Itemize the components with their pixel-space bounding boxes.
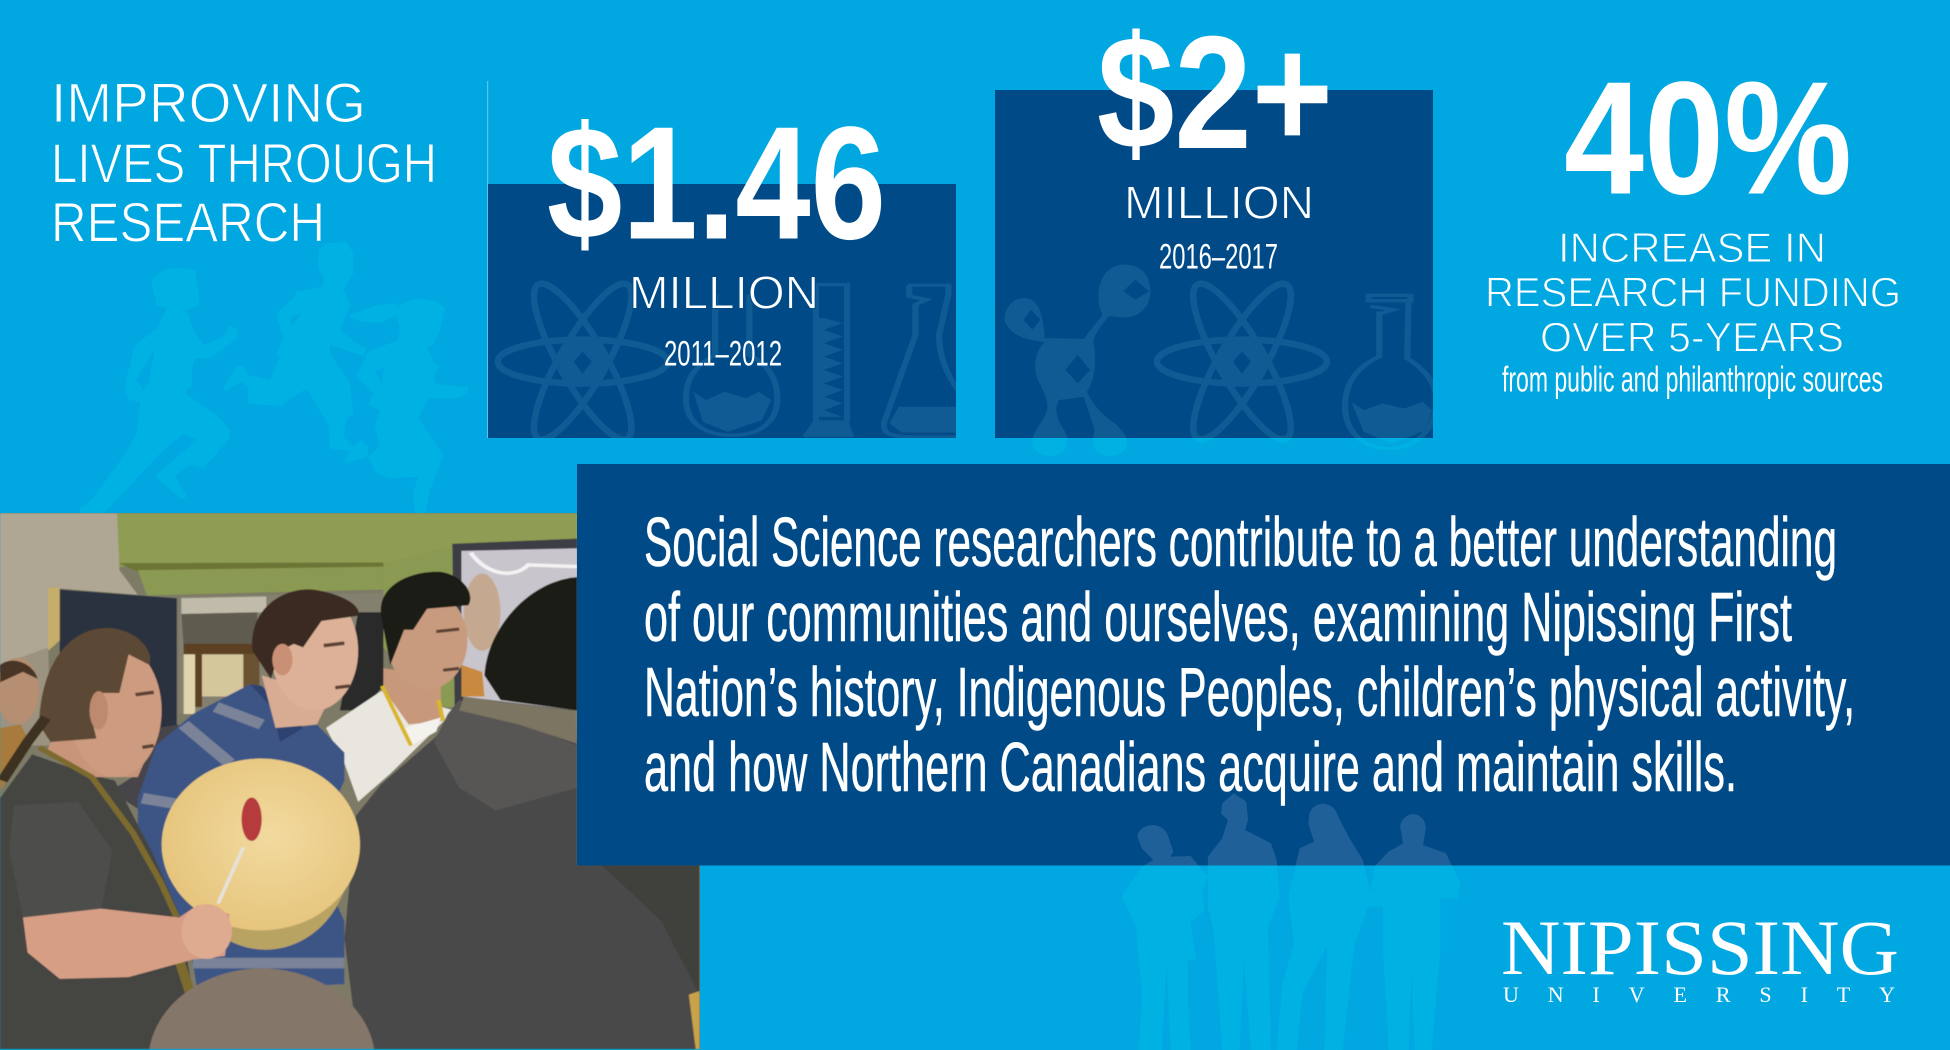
icons: molecule, atom, flask [1004,264,1433,438]
hooded person [344,710,699,1049]
third drummer [326,691,455,802]
silhouette: running children [80,242,468,513]
figure: $1.46: $1.46 [547,94,886,274]
logo: Nipissing University: NIPISSING [1501,904,1899,991]
heading [51,71,437,254]
panel: 2016-2017 funding [995,3,1436,456]
second drummer [138,684,344,991]
drum [230,892,344,950]
silhouette: standing group [1122,793,1460,1050]
icons: lab glassware [494,280,956,438]
icons: overflow below panel [1032,438,1423,456]
heading: LIVES THROUGH [51,132,437,194]
label: over 5 years: OVER 5-YEARS [1540,314,1844,360]
heading: IMPROVING [51,71,366,134]
panel background [488,184,956,438]
heading: RESEARCH [51,190,325,254]
panel background [995,90,1433,438]
label: years: 2016–2017 [1159,238,1278,276]
photo: drum circle [0,511,703,1049]
logo: Nipissing University: UNIVERSITY [1503,982,1895,1007]
label: research funding: RESEARCH FUNDING [1485,268,1901,316]
panel background [577,464,1950,866]
figure: $2+: $2+ [1097,3,1333,183]
figure: 40%: 40% [1564,48,1852,228]
label: increase: INCREASE IN [1558,224,1826,271]
label: million: MILLION [1124,176,1314,228]
foreground head [149,968,374,1049]
text: statement paragraph [644,503,1855,806]
panel: statement [577,464,1950,866]
divider line [487,81,488,438]
stat: 40 percent increase [1485,48,1901,400]
first drummer [0,754,193,1049]
label: million: MILLION [629,266,819,318]
label: years: 2011–2012 [664,334,782,374]
panel: 2011-2012 funding [488,119,956,438]
